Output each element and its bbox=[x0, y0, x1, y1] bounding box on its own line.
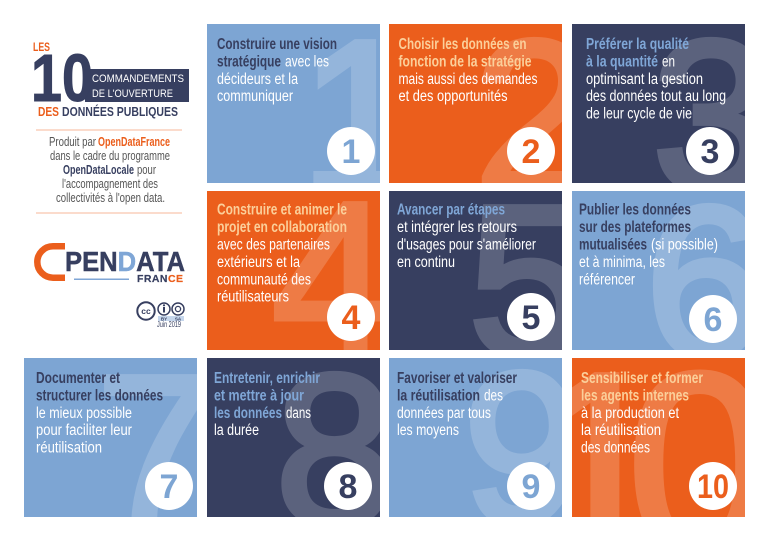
badge: number 3: 3 bbox=[701, 133, 719, 171]
text: commandment 6: Publier les données bbox=[579, 202, 691, 219]
icon: creative commons licence: cc bbox=[141, 306, 151, 316]
logo: OpenData France bbox=[37, 246, 185, 285]
badge: number 10: 10 bbox=[697, 468, 729, 506]
badge: number 5: 5 bbox=[522, 299, 540, 337]
badge: number 1: 1 bbox=[342, 133, 360, 171]
title: COMMANDEMENTS bbox=[92, 73, 184, 85]
text: commandment 6: (si possible) bbox=[651, 236, 718, 254]
text: commandment 8: Entretenir, enrichir bbox=[214, 370, 320, 387]
text: commandment 4: communauté des bbox=[217, 271, 311, 288]
text: commandment 8: et mettre à jour bbox=[214, 387, 304, 404]
text: commandment 8: la durée bbox=[214, 422, 259, 439]
panel: commandment 1 bbox=[207, 24, 380, 183]
title: DONNÉES PUBLIQUES bbox=[62, 104, 178, 119]
badge: number 2: 2 bbox=[522, 133, 540, 171]
text: commandment 7: pour faciliter leur bbox=[36, 422, 132, 439]
logo: OpenData France: PENDATA bbox=[65, 246, 185, 277]
title bbox=[31, 40, 189, 119]
text block: credits: OpenDataFrance bbox=[98, 134, 170, 149]
text: commandment 4: avec des partenaires bbox=[217, 236, 330, 254]
text: commandment 9: les moyens bbox=[397, 422, 459, 439]
badge: number 10 bbox=[689, 462, 737, 510]
text: commandment 10: les agents internes bbox=[581, 387, 689, 404]
panel: commandment 8 bbox=[207, 358, 380, 517]
icon: creative commons licence: Juin 2019 bbox=[157, 320, 181, 329]
text: commandment 5 bbox=[397, 202, 536, 271]
panel: commandment 3 bbox=[572, 24, 745, 183]
badge: number 7 bbox=[145, 462, 193, 510]
icon: creative commons licence bbox=[137, 302, 184, 329]
panel: commandment 4 bbox=[207, 191, 380, 350]
text: commandment 1: avec les bbox=[285, 53, 329, 70]
text: commandment 3: Préférer la qualité bbox=[586, 36, 689, 53]
text: commandment 7: structurer les données bbox=[36, 387, 163, 404]
logo: OpenData France: FRANCE bbox=[137, 273, 183, 285]
text block: credits: pour bbox=[137, 162, 156, 177]
text: commandment 4: projet en collaboration bbox=[217, 219, 347, 236]
text: commandment 4: Construire et animer le bbox=[217, 202, 347, 219]
badge: number 8 bbox=[324, 462, 372, 510]
text: commandment 7: le mieux possible bbox=[36, 405, 132, 422]
badge: number 6: 6 bbox=[704, 301, 722, 339]
title: 10 bbox=[31, 41, 93, 116]
badge: number 4 bbox=[327, 293, 375, 341]
text block: credits: Produit par bbox=[49, 134, 96, 149]
icon: creative commons licence: SA bbox=[175, 316, 182, 322]
text: commandment 2: et des opportunités bbox=[398, 88, 508, 105]
text: commandment 3 bbox=[586, 36, 726, 123]
text block: credits: l'accompagnement des bbox=[62, 176, 158, 191]
text: commandment 1: Construire une vision bbox=[217, 36, 337, 53]
text: commandment 6: sur des plateformes bbox=[579, 219, 691, 236]
text: commandment 1 bbox=[217, 36, 337, 105]
text: commandment 8 bbox=[214, 370, 320, 439]
text: commandment 2 bbox=[398, 36, 538, 105]
text: commandment 3: de leur cycle de vie bbox=[586, 106, 692, 123]
watermark digits 10 bbox=[572, 358, 745, 517]
text: commandment 4: extérieurs et la bbox=[217, 254, 300, 271]
panel: commandment 5 bbox=[389, 191, 562, 350]
text: commandment 6 bbox=[579, 202, 718, 288]
text: commandment 9 bbox=[397, 370, 517, 439]
badge: number 8: 8 bbox=[339, 468, 357, 506]
text: commandment 4: réutilisateurs bbox=[217, 289, 289, 306]
text: commandment 2: Choisir les données en bbox=[398, 36, 526, 53]
text block: credits: OpenDataLocale bbox=[63, 162, 134, 177]
text: commandment 1: stratégique bbox=[217, 53, 281, 70]
badge: number 9: 9 bbox=[522, 468, 540, 506]
text: commandment 3: optimisant la gestion bbox=[586, 71, 703, 88]
text: commandment 2: fonction de la stratégie bbox=[398, 53, 532, 70]
text: commandment 10: à la production et bbox=[581, 405, 680, 422]
panel: commandment 9 bbox=[389, 358, 562, 517]
title: LES bbox=[33, 40, 50, 54]
badge: number 1 bbox=[327, 127, 375, 175]
badge: number 3 bbox=[686, 127, 734, 175]
text: commandment 5: Avancer par étapes bbox=[397, 202, 505, 219]
text: commandment 9: données par tous bbox=[397, 405, 491, 422]
badge: number 7: 7 bbox=[160, 468, 178, 506]
text: commandment 2: mais aussi des demandes bbox=[398, 71, 538, 88]
text block: credits: collectivités à l'open data. bbox=[56, 190, 165, 205]
text: commandment 5: d'usages pour s'améliorer bbox=[397, 236, 536, 254]
text: commandment 4 bbox=[217, 202, 347, 306]
text block: credits: dans le cadre du programme bbox=[50, 148, 170, 163]
text: commandment 3: à la quantité bbox=[586, 53, 658, 70]
text: commandment 9: la réutilisation bbox=[397, 387, 480, 404]
text: commandment 9: des bbox=[484, 387, 503, 404]
text: commandment 6: et à minima, les bbox=[579, 254, 665, 271]
text: commandment 7: réutilisation bbox=[36, 440, 102, 457]
text: commandment 9: Favoriser et valoriser bbox=[397, 370, 517, 387]
text: commandment 6: mutualisées bbox=[579, 236, 647, 254]
text: commandment 5: et intégrer les retours bbox=[397, 219, 517, 236]
text: commandment 8: les données bbox=[214, 405, 282, 422]
panel: commandment 10 bbox=[572, 358, 745, 517]
text: commandment 3: des données tout au long bbox=[586, 88, 726, 105]
text: commandment 1: décideurs et la bbox=[217, 71, 298, 88]
text: commandment 10: la réutilisation bbox=[581, 422, 661, 439]
title: DE L'OUVERTURE bbox=[92, 88, 173, 100]
text: commandment 8: dans bbox=[286, 405, 311, 422]
text: commandment 7 bbox=[36, 370, 163, 457]
text: commandment 6: référencer bbox=[579, 271, 635, 288]
text: commandment 3: en bbox=[662, 53, 675, 70]
text: commandment 1: communiquer bbox=[217, 88, 293, 105]
text: commandment 5: en continu bbox=[397, 254, 455, 271]
panel: commandment 2 bbox=[389, 24, 562, 183]
text: commandment 10: des données bbox=[581, 440, 650, 457]
text: commandment 10: Sensibiliser et former bbox=[581, 370, 703, 387]
text: commandment 10 bbox=[581, 370, 703, 457]
text block: credits bbox=[49, 134, 170, 205]
badge: number 9 bbox=[507, 462, 555, 510]
panel: commandment 7 bbox=[24, 358, 197, 517]
title: DES bbox=[38, 104, 59, 119]
panel: commandment 6 bbox=[572, 191, 745, 350]
badge: number 2 bbox=[507, 127, 555, 175]
text: commandment 7: Documenter et bbox=[36, 370, 120, 387]
badge: number 6 bbox=[689, 295, 737, 343]
badge: number 4: 4 bbox=[342, 299, 361, 337]
badge: number 5 bbox=[507, 293, 555, 341]
icon: creative commons licence: BY bbox=[161, 316, 167, 322]
